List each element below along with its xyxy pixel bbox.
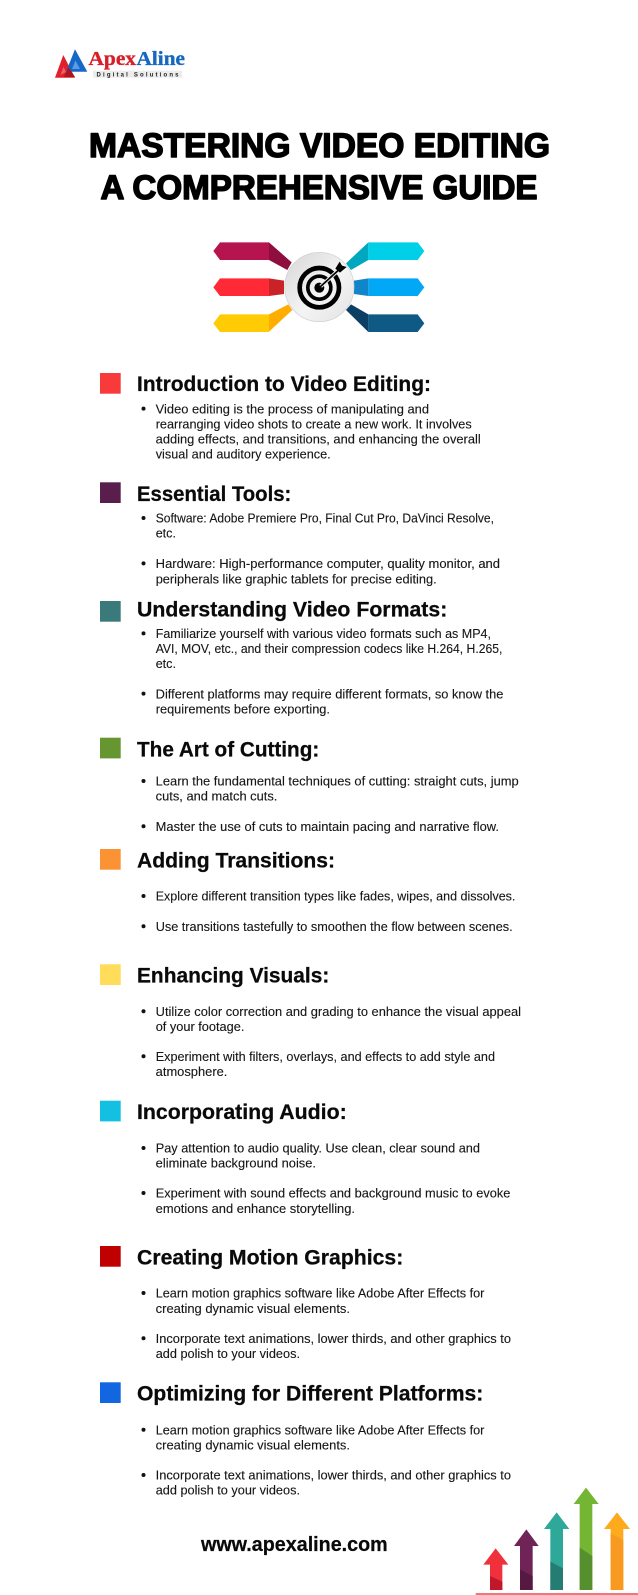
bullet: formats: AVI, MOV, etc., and their compression codecs like H.264, H.265, xyxy=(156,641,502,656)
bullet: software xyxy=(142,511,494,541)
bullet text: visual and auditory experience. xyxy=(156,447,331,462)
title xyxy=(89,127,550,207)
logo: ApexAline Digital Solutions xyxy=(55,48,185,78)
bullet: sound effects: Experiment with sound effects and background music to evoke xyxy=(156,1186,510,1201)
bullet: platforms xyxy=(142,686,503,716)
section: Adding Transitions xyxy=(100,849,515,934)
bullet: techniques: cuts, and match cuts. xyxy=(156,789,277,804)
bullet: platforms: Different platforms may require different formats, so know the xyxy=(156,686,503,701)
title: A COMPREHENSIVE GUIDE xyxy=(100,169,538,207)
bullet: pacing: Master the use of cuts to maintain pacing and narrative flow. xyxy=(156,819,499,834)
bullet: filters xyxy=(142,1049,495,1079)
bullet: text animations: add polish to your videos. xyxy=(156,1483,300,1498)
bullet: formats: etc. xyxy=(156,656,176,671)
bullet: tasteful use: Use transitions tastefully to smoothen the flow between scenes. xyxy=(156,919,513,934)
bullet: hardware: peripherals like graphic tablets for precise editing. xyxy=(156,571,437,586)
color square xyxy=(100,738,121,758)
color square xyxy=(100,849,121,870)
bullet: software: Learn motion graphics software like Adobe After Effects for xyxy=(156,1422,485,1437)
heading: Optimizing for Different Platforms: xyxy=(137,1383,483,1406)
bullet: text animations: Incorporate text animations, lower thirds, and other graphics to xyxy=(156,1468,511,1483)
heading: Essential Tools: xyxy=(137,483,291,506)
color square xyxy=(100,601,121,622)
bullet: hardware: Hardware: High-performance computer, quality monitor, and xyxy=(156,556,500,571)
heading: Introduction to Video Editing: xyxy=(137,373,431,396)
section: Creating Motion Graphics xyxy=(100,1246,511,1361)
bullet: software: creating dynamic visual elements. xyxy=(156,1301,350,1316)
bullet: software xyxy=(142,1422,485,1452)
bullet: formats: Familiarize yourself with various video formats such as MP4, xyxy=(156,626,491,641)
bullet: formats xyxy=(142,626,502,671)
heading: Incorporating Audio: xyxy=(137,1101,347,1124)
section: The Art of Cutting xyxy=(100,738,519,834)
bullet: color correction xyxy=(142,1004,521,1034)
bullet: software: Learn motion graphics software like Adobe After Effects for xyxy=(156,1286,485,1301)
bullet: audio quality: eliminate background noise. xyxy=(156,1156,316,1171)
color square xyxy=(100,1246,121,1267)
heading: Adding Transitions: xyxy=(137,849,335,872)
logo: ApexAline Digital Solutions: Digital Solutions xyxy=(96,72,179,78)
bullet: software xyxy=(142,1286,485,1316)
color square xyxy=(100,482,121,503)
bullet: software: etc. xyxy=(156,526,176,541)
bullet: audio quality xyxy=(142,1141,480,1171)
bullet: techniques xyxy=(142,774,519,804)
bullet: text animations xyxy=(142,1468,511,1498)
section: Understanding Video Formats xyxy=(100,598,503,716)
bullet: text animations xyxy=(142,1331,511,1361)
bullet: techniques: Learn the fundamental techniques of cutting: straight cuts, jump xyxy=(156,774,519,789)
bullet: color correction: Utilize color correction and grading to enhance the visual appeal xyxy=(156,1004,521,1019)
heading: Creating Motion Graphics: xyxy=(137,1246,403,1269)
website url: www.apexaline.com xyxy=(200,1533,388,1556)
bullet: sound effects: emotions and enhance storytelling. xyxy=(156,1201,355,1216)
bullet: text animations: add polish to your videos. xyxy=(156,1346,300,1361)
section: Enhancing Visuals xyxy=(100,964,521,1079)
bullet: platforms: requirements before exporting. xyxy=(156,701,330,716)
bullet text: rearranging video shots to create a new work. It involves xyxy=(156,416,472,431)
bullet text: Video editing is the process of manipulating and xyxy=(156,401,429,416)
bullet: software: creating dynamic visual elements. xyxy=(156,1437,350,1452)
bullet: filters: atmosphere. xyxy=(156,1064,227,1079)
bullet text: adding effects, and transitions, and enhancing the overall xyxy=(156,432,481,447)
logo: ApexAline Digital Solutions: Apex xyxy=(88,48,136,70)
title: MASTERING VIDEO EDITING xyxy=(89,127,550,165)
bullet: audio quality: Pay attention to audio quality. Use clean, clear sound and xyxy=(156,1141,480,1156)
bullet: hardware xyxy=(142,556,500,586)
bullet: filters: Experiment with filters, overlays, and effects to add style and xyxy=(156,1049,495,1064)
heading: Enhancing Visuals: xyxy=(137,965,329,988)
heading: Understanding Video Formats: xyxy=(137,598,447,621)
bullet: text animations: Incorporate text animations, lower thirds, and other graphics to xyxy=(156,1331,511,1346)
color square xyxy=(100,373,121,394)
heading: The Art of Cutting: xyxy=(137,739,319,762)
section: Incorporating Audio xyxy=(100,1101,510,1216)
bullet: sound effects xyxy=(142,1186,510,1216)
section: Essential Tools xyxy=(100,482,500,586)
section: Introduction to Video Editing xyxy=(100,373,481,462)
bullet: software: Software: Adobe Premiere Pro, Final Cut Pro, DaVinci Resolve, xyxy=(156,511,494,526)
icon: rising arrows xyxy=(476,1488,638,1595)
bullet: color correction: of your footage. xyxy=(156,1019,244,1034)
color square xyxy=(100,964,121,985)
color square xyxy=(100,1382,121,1403)
logo: ApexAline Digital Solutions: Aline xyxy=(136,48,185,70)
bullet text xyxy=(142,401,481,462)
bullet: types: Explore different transition types like fades, wipes, and dissolves. xyxy=(156,889,515,904)
color square xyxy=(100,1101,121,1121)
icon: target with six ribbons xyxy=(213,242,424,332)
section: Optimizing for Different Platforms xyxy=(100,1382,511,1498)
